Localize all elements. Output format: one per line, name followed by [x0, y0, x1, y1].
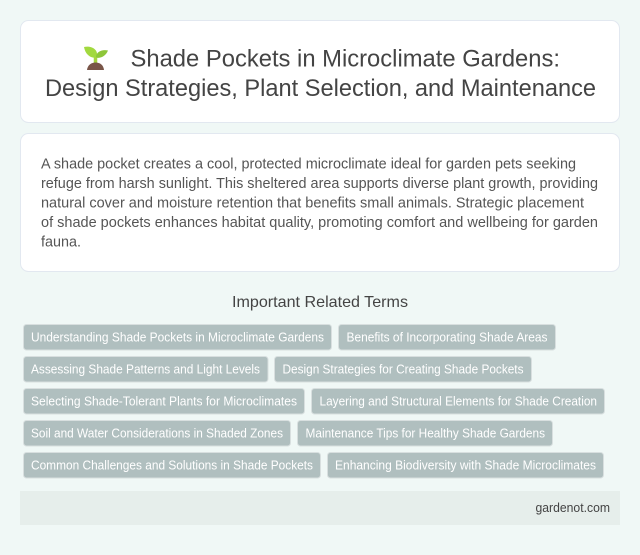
tag — [298, 420, 552, 446]
tag — [338, 324, 556, 350]
tag: Common Challenges and Solutions in Shade Pockets — [31, 458, 313, 472]
footer source: gardenot.com — [536, 501, 610, 515]
tag: Enhancing Biodiversity with Shade Microclimates — [335, 458, 596, 472]
tag: Maintenance Tips for Healthy Shade Gardens — [306, 426, 545, 440]
tag: Layering and Structural Elements for Shade Creation — [320, 394, 597, 408]
description text: natural cover and moisture retention that benefits small animals. Strategic placement — [41, 195, 584, 211]
icon: seedling — [84, 47, 108, 70]
tag — [24, 452, 320, 478]
heading: related terms: Important Related Terms — [232, 294, 408, 311]
panel: title card — [20, 20, 620, 122]
tag — [328, 452, 604, 478]
tag — [24, 420, 290, 446]
tag — [274, 356, 532, 382]
tag: Benefits of Incorporating Shade Areas — [346, 330, 548, 344]
related terms tags — [24, 324, 604, 478]
tag — [24, 324, 332, 350]
description text: fauna. — [41, 234, 81, 250]
tag — [24, 388, 304, 414]
footer bar — [20, 491, 620, 525]
tag: Soil and Water Considerations in Shaded Zones — [31, 426, 283, 440]
tag — [312, 388, 604, 414]
title: Design Strategies, Plant Selection, and Maintenance — [45, 75, 596, 102]
description text: of shade pockets enhances habitat quality, promoting comfort and wellbeing for garden — [41, 215, 598, 231]
description text — [41, 156, 598, 250]
title: Shade Pockets in Microclimate Gardens: — [130, 46, 560, 72]
tag: Selecting Shade-Tolerant Plants for Microclimates — [31, 394, 297, 408]
description text: A shade pocket creates a cool, protected microclimate ideal for garden pets seeking — [41, 156, 576, 172]
description text: refuge from harsh sunlight. This sheltered area supports diverse plant growth, providing — [41, 176, 598, 192]
tag — [24, 356, 268, 382]
title — [45, 46, 596, 102]
tag: Assessing Shade Patterns and Light Levels — [31, 362, 260, 376]
tag: Understanding Shade Pockets in Microclimate Gardens — [31, 330, 324, 344]
panel: description card — [20, 134, 620, 272]
tag: Design Strategies for Creating Shade Pockets — [282, 362, 524, 376]
